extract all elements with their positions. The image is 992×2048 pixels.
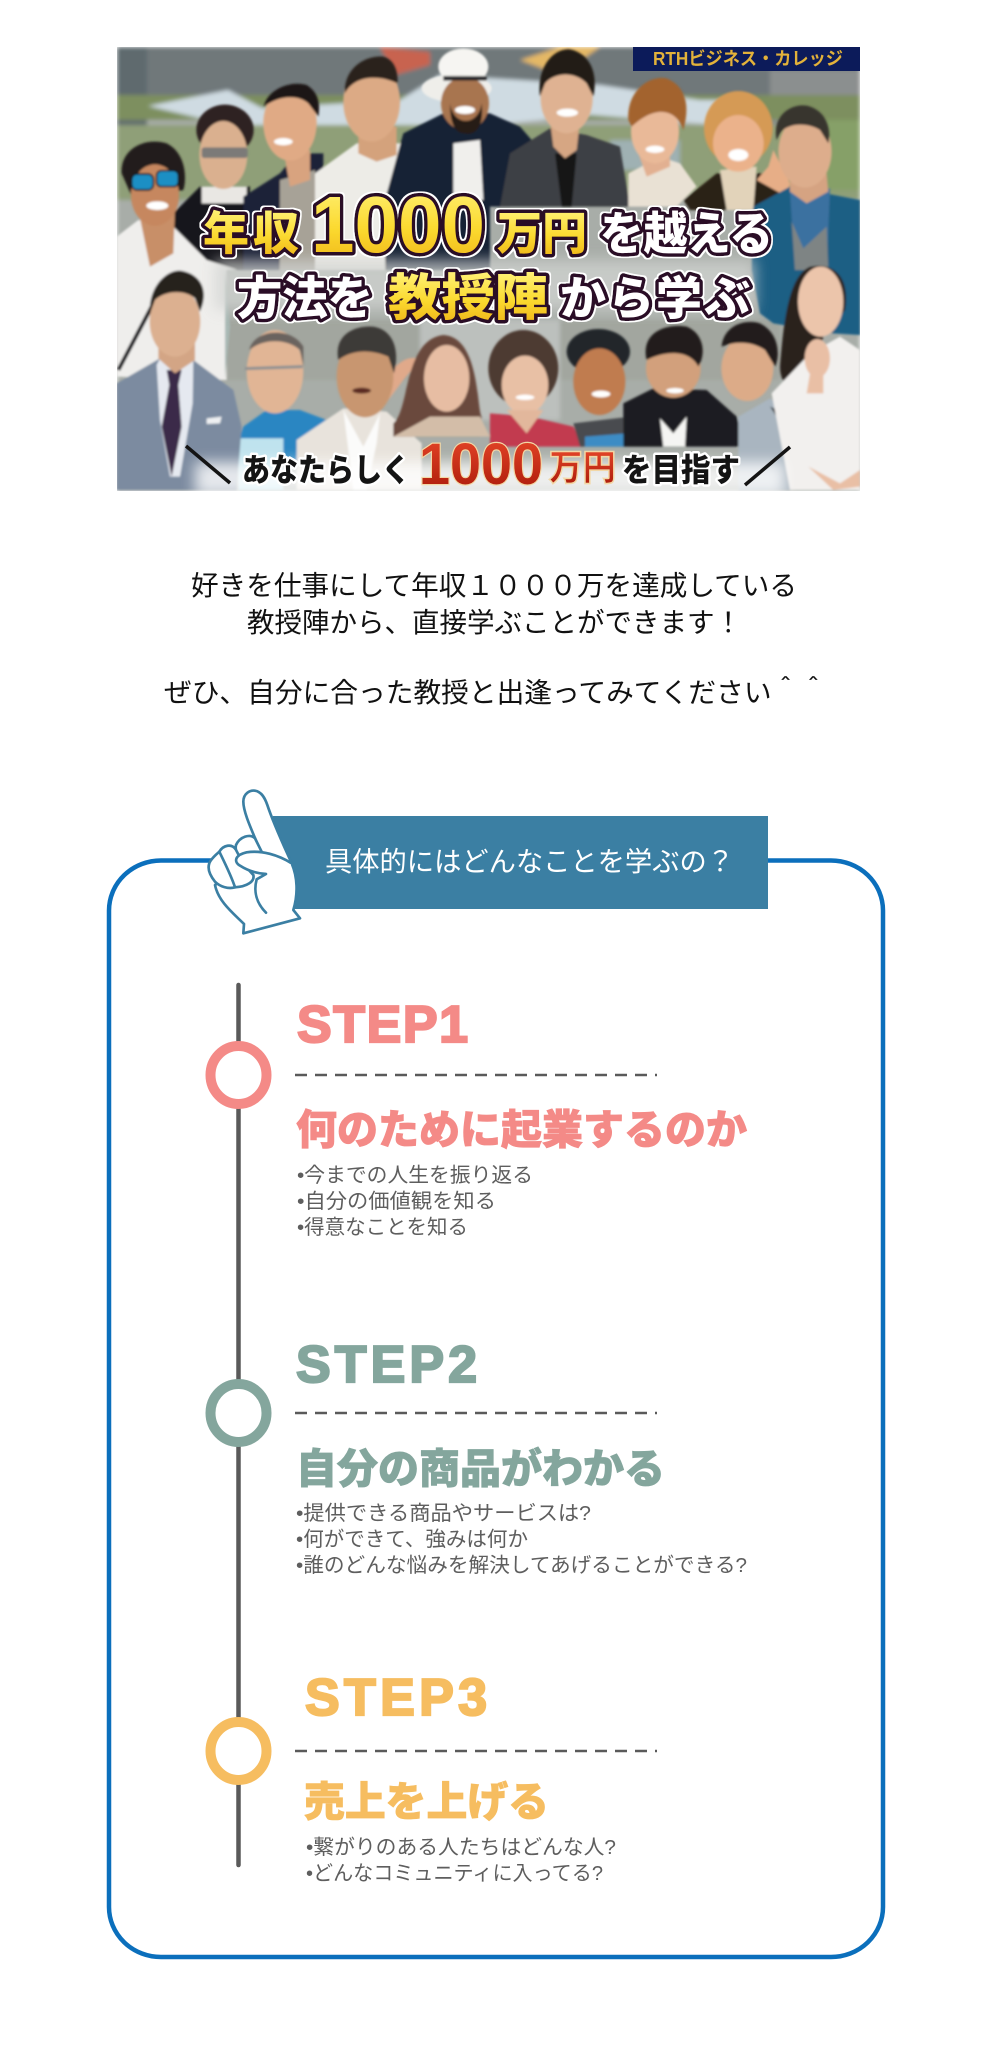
portraits: top row right [490, 49, 860, 270]
step 2 heading: 自分の商品がわかる [296, 1446, 665, 1492]
step 1 heading: 何のために起業するのか [296, 1107, 747, 1153]
step 2 [210, 1336, 747, 1577]
headline line 1: 万円 [497, 208, 587, 260]
tagline with slashes: を目指す [622, 452, 740, 488]
step 3 [210, 1669, 657, 1885]
step 1 list: •今までの人生を振り返る [297, 1164, 533, 1187]
step 3 marker [210, 1722, 266, 1780]
tagline with slashes: 万円 [549, 447, 616, 488]
step 2 list: •誰のどんな悩みを解決してあげることができる? [296, 1554, 747, 1577]
step 3 list: •繋がりのある人たちはどんな人? [306, 1836, 616, 1859]
portraits: top row left [117, 48, 492, 270]
tagline with slashes: あなたらしく [242, 452, 410, 488]
step 3 label: STEP3 [305, 1669, 487, 1727]
step 3 heading: 売上を上げる [304, 1779, 549, 1825]
step 1 list [297, 1164, 533, 1239]
step 2 divider [295, 1412, 657, 1414]
headline line 1: を越える [600, 208, 773, 260]
intro text block: 教授陣から、直接学ぶことができます！ [247, 607, 742, 638]
step 2 marker [210, 1384, 266, 1442]
tagline with slashes: 1000 [419, 432, 543, 497]
step 2 list: •何ができて、強みは何か [296, 1528, 528, 1551]
step 1 list: •得意なことを知る [297, 1216, 468, 1239]
step 1 marker [210, 1046, 266, 1104]
headline line 2 [237, 270, 750, 326]
bottom white glow [195, 462, 785, 496]
soft pale haze behind headline [215, 260, 755, 310]
icon: pointing hand [209, 791, 300, 933]
headline line 2: 方法を [237, 272, 373, 324]
step 1 label: STEP1 [297, 996, 468, 1054]
headline line 2: 教授陣 [388, 270, 548, 326]
intro text block: ぜひ、自分に合った教授と出逢ってみてください＾＾ [164, 675, 827, 708]
photo: faculty portraits [117, 48, 860, 490]
intro text block [164, 570, 827, 708]
step 2 list: •提供できる商品やサービスは? [296, 1502, 591, 1525]
step 3 list: •どんなコミュニティに入ってる? [306, 1862, 603, 1885]
step 3 list [306, 1836, 616, 1885]
headline line 1: 年収 [203, 208, 299, 260]
portraits: lower row left [117, 270, 490, 490]
step 2 label: STEP2 [296, 1336, 477, 1394]
headline line 1: 1000 [311, 180, 485, 269]
step 3 divider [295, 1750, 657, 1752]
step 1 list: •自分の価値観を知る [297, 1190, 496, 1213]
tagline with slashes [184, 442, 792, 487]
banner background: city plaza [117, 47, 860, 491]
label: RTH business college: RTHビジネス・カレッジ [653, 48, 843, 69]
timeline vertical line [236, 985, 241, 1865]
intro text block: 好きを仕事にして年収１０００万を達成している [191, 570, 797, 601]
step 1 divider [295, 1074, 657, 1076]
panel: rounded card outline [109, 860, 883, 1957]
banner: faculty group photo with headline [117, 47, 860, 497]
step 2 list [296, 1502, 747, 1577]
headline line 2: から学ぶ [560, 272, 750, 324]
heading banner: what will you learn: 具体的にはどんなことを学ぶの？ [325, 846, 734, 877]
portraits: lower row right [488, 266, 860, 490]
heading banner: what will you learn [273, 816, 768, 909]
headline line 1 [199, 191, 773, 260]
step 1 [210, 996, 747, 1239]
